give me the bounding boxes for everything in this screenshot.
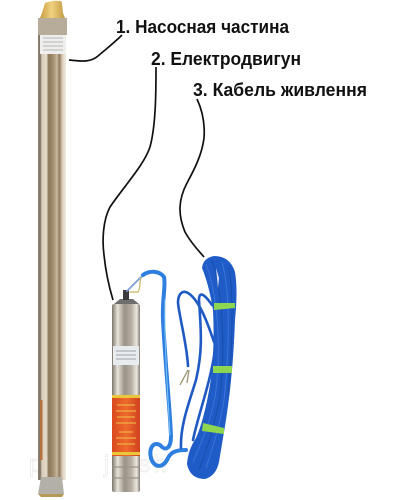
coil strands [193,260,232,470]
red warning label [112,395,140,456]
coil body [187,256,236,479]
label 2: 2. Електродвигун [151,49,301,69]
brass head [40,1,65,18]
motor head [114,299,139,304]
label 1: 1. Насосная частина [116,17,290,37]
coil inner gap [216,268,219,288]
copper reflection [40,400,42,460]
loose loop [178,292,215,448]
wire ends [180,370,189,385]
pipe body [38,18,66,480]
leader line 1 [69,35,122,61]
top mesh band [38,18,67,35]
watermark [29,451,170,478]
motor [112,290,140,492]
leader line 3 [180,99,204,257]
label 3: 3. Кабель живлення [193,80,367,100]
cable coil [178,256,236,479]
green cable ties [202,303,235,434]
leader line 2 [103,67,156,300]
specification label [40,35,66,54]
base rings [112,467,140,478]
pump section [38,1,67,497]
motor body [112,304,140,492]
watermark: p.c [29,451,61,478]
watermark: jp.sh [103,451,170,478]
strainer [38,477,64,494]
plate label [113,346,139,365]
motor lead cable [127,272,186,466]
